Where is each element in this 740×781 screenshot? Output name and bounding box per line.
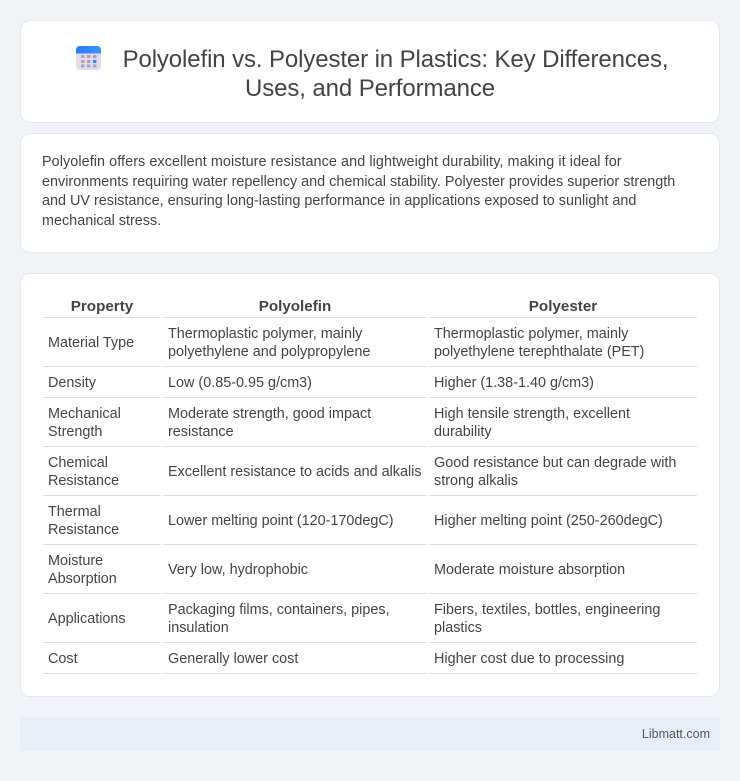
summary text [42,154,675,229]
row: moisture absorption: Moderate moisture absorption [434,562,625,578]
summary text: mechanical stress. [42,213,161,229]
row: cost: Generally lower cost [168,651,298,667]
row: chemical resistance: Resistance [48,473,119,489]
row: mechanical strength: Strength [48,424,102,440]
column headers: Property [71,298,133,315]
row: applications: Applications [48,611,126,627]
row: thermal resistance: Lower melting point (120-170degC) [168,513,394,529]
column headers: Polyolefin [259,298,331,315]
row: thermal resistance: Thermal [48,504,101,520]
row: mechanical strength: Moderate strength, good impact [168,406,371,422]
row: mechanical strength: High tensile strength, excellent [434,406,630,422]
row: material type: polyethylene and polypropylene [168,344,370,360]
comparison table panel [20,273,720,697]
row: density: Higher (1.38-1.40 g/cm3) [434,375,594,391]
row: moisture absorption: Moisture [48,553,103,569]
footer credit: Libmatt.com [642,727,710,741]
row: chemical resistance: Excellent resistance to acids and alkalis [168,464,422,480]
row: density: Low (0.85-0.95 g/cm3) [168,375,312,391]
row: mechanical strength: durability [434,424,492,440]
row: chemical resistance [48,455,676,489]
title: Uses, and Performance [245,75,495,102]
row: cost: Cost [48,651,78,667]
row: material type: Thermoplastic polymer, mainly [434,326,628,342]
summary text: and UV resistance, ensuring long-lasting performance in applications exposed to sunlight and [42,193,636,209]
row: thermal resistance: Resistance [48,522,119,538]
row: chemical resistance: Chemical [48,455,108,471]
row: cost [48,651,624,667]
row: material type: Material Type [48,335,134,351]
row: applications: Packaging films, containers, pipes, [168,602,390,618]
row: density [48,375,594,391]
row: density: Density [48,375,96,391]
row: moisture absorption: Absorption [48,571,117,587]
icon: calendar [76,46,101,70]
row: material type [48,326,644,360]
row: applications: plastics [434,620,482,636]
column headers [71,298,597,315]
title [123,46,668,102]
title: Polyolefin vs. Polyester in Plastics: Key Differences, [123,46,668,73]
row: material type: Thermoplastic polymer, mainly [168,326,362,342]
row: applications: Fibers, textiles, bottles, engineering [434,602,660,618]
row: thermal resistance [48,504,663,538]
row: mechanical strength [48,406,630,440]
footer bar [20,717,720,751]
summary panel [20,133,720,253]
row: moisture absorption: Very low, hydrophobic [168,562,308,578]
row: applications: insulation [168,620,229,636]
row: chemical resistance: strong alkalis [434,473,518,489]
row: mechanical strength: resistance [168,424,234,440]
header panel [20,20,720,123]
column headers: Polyester [529,298,597,315]
row: applications [48,602,660,636]
summary text: environments requiring water repellency and chemical stability. Polyester provides superior strength [42,174,675,190]
row: mechanical strength: Mechanical [48,406,121,422]
row: moisture absorption [48,553,625,587]
row: cost: Higher cost due to processing [434,651,624,667]
row: thermal resistance: Higher melting point (250-260degC) [434,513,663,529]
row: chemical resistance: Good resistance but can degrade with [434,455,676,471]
row: material type: polyethylene terephthalate (PET) [434,344,644,360]
summary text: Polyolefin offers excellent moisture resistance and lightweight durability, making it ideal for [42,154,622,170]
